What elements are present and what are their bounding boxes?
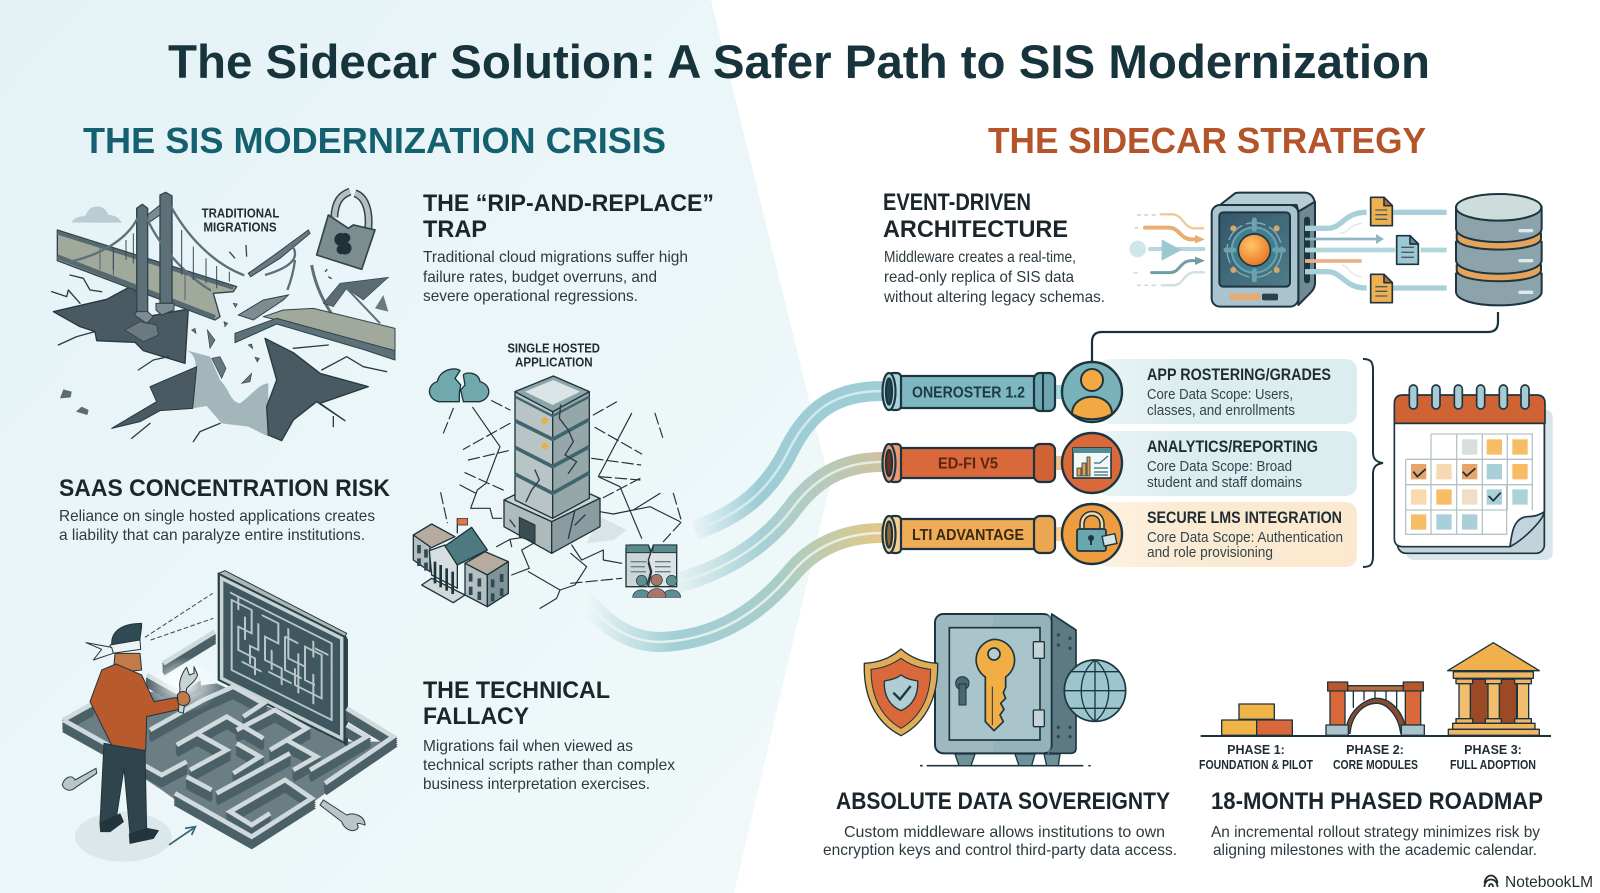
card text: Core Data Scope: Broad xyxy=(1147,459,1292,475)
card text xyxy=(1147,438,1318,491)
phase 3 label: FULL ADOPTION xyxy=(1450,758,1536,772)
illustration: blindfolded technician at maze xyxy=(62,571,397,862)
text block: event-driven architecture: Middleware creates a real-time, xyxy=(884,249,1076,266)
back maze wall xyxy=(218,571,347,745)
text block: rip-and-replace trap: severe operational regressions. xyxy=(423,288,638,305)
person xyxy=(86,623,198,843)
phase 1 label xyxy=(1199,743,1313,772)
loose wrench right xyxy=(320,800,365,831)
text block: the technical fallacy: THE TECHNICAL xyxy=(423,677,610,704)
background: left crisis panel xyxy=(0,0,830,893)
text block: absolute data sovereignty: Custom middleware allows institutions to own xyxy=(844,824,1165,841)
shield xyxy=(864,649,938,736)
tower xyxy=(504,477,600,522)
phase 1 label: PHASE 1: xyxy=(1227,743,1285,757)
text block: absolute data sovereignty xyxy=(823,788,1177,859)
icon: analytics xyxy=(1062,433,1122,493)
documents xyxy=(1371,197,1418,303)
standards row: oneroster xyxy=(882,359,1357,424)
text block: rip-and-replace trap xyxy=(423,190,714,305)
pipe label: LTI ADVANTAGE xyxy=(912,527,1024,544)
towers xyxy=(160,192,172,303)
pipe label: ONEROSTER 1.2 xyxy=(912,384,1025,402)
database xyxy=(1456,194,1542,305)
pipe label: ED-FI V5 xyxy=(938,456,998,472)
icon: academic calendar xyxy=(1394,385,1553,560)
text block: rip-and-replace trap: failure rates, budget overruns, and xyxy=(423,269,657,286)
document and people xyxy=(626,545,652,587)
outbound flows xyxy=(1305,212,1447,288)
card text: ANALYTICS/REPORTING xyxy=(1147,438,1318,456)
text block: event-driven architecture xyxy=(883,189,1105,306)
dashed failure lines xyxy=(441,400,682,608)
left cliff xyxy=(53,285,188,363)
text block: the technical fallacy: technical scripts rather than complex xyxy=(423,757,675,774)
label: single hosted application xyxy=(507,341,600,369)
padlock xyxy=(334,192,369,228)
text block: absolute data sovereignty: ABSOLUTE DATA SOVEREIGNTY xyxy=(836,788,1170,815)
card text xyxy=(1147,366,1331,419)
card text: Core Data Scope: Authentication xyxy=(1147,530,1343,546)
chasm mist xyxy=(185,350,268,437)
text block: event-driven architecture: EVENT-DRIVEN xyxy=(883,189,1031,216)
phase 1 label: FOUNDATION & PILOT xyxy=(1199,758,1313,772)
pipe xyxy=(882,444,1065,482)
label: traditional migrations: TRADITIONAL xyxy=(202,206,280,220)
right deck xyxy=(263,308,395,352)
heading: crisis: THE SIS MODERNIZATION CRISIS xyxy=(83,120,666,161)
text block: absolute data sovereignty: encryption keys and control third-party data access. xyxy=(823,842,1177,859)
text block: the technical fallacy: FALLACY xyxy=(423,703,529,730)
card text: and role provisioning xyxy=(1147,545,1273,561)
label: single hosted application: APPLICATION xyxy=(515,355,593,369)
phase labels xyxy=(1199,743,1536,772)
illustration: cracked single hosted application tower xyxy=(413,341,682,608)
card text: SECURE LMS INTEGRATION xyxy=(1147,509,1342,527)
card text: student and staff domains xyxy=(1147,475,1302,491)
card xyxy=(1098,431,1357,496)
label: traditional migrations: MIGRATIONS xyxy=(203,220,277,234)
card xyxy=(1098,359,1357,424)
broken pieces xyxy=(248,230,310,277)
text block: 18-month phased roadmap: 18-MONTH PHASED ROADMAP xyxy=(1211,788,1543,815)
text block: 18-month phased roadmap xyxy=(1211,788,1543,859)
connector: database to standards xyxy=(1092,312,1498,364)
pipe xyxy=(882,373,1065,411)
foundation bricks xyxy=(1222,704,1292,735)
server body xyxy=(1212,193,1315,307)
data streams connecting crisis to strategy xyxy=(585,391,882,642)
bridge xyxy=(1326,682,1424,735)
illustration: safe with key, shield and globe xyxy=(864,614,1126,766)
illustration: phased roadmap milestones xyxy=(1201,643,1551,736)
floor maze walls xyxy=(63,632,393,847)
label: traditional migrations xyxy=(202,206,280,234)
text block: event-driven architecture: read-only replica of SIS data xyxy=(884,269,1074,286)
text block: rip-and-replace trap: THE “RIP-AND-REPLACE” xyxy=(423,190,714,217)
logo: notebooklm: NotebookLM xyxy=(1505,874,1593,891)
icon: user xyxy=(1062,362,1122,422)
heading: strategy: THE SIDECAR STRATEGY xyxy=(988,120,1426,161)
card text: classes, and enrollments xyxy=(1147,403,1295,419)
illustration: collapsed bridge xyxy=(52,192,395,442)
standards row: ed-fi xyxy=(882,431,1357,496)
card text: Core Data Scope: Users, xyxy=(1147,387,1293,403)
pipe xyxy=(882,516,1065,553)
left deck xyxy=(57,230,237,320)
text block: the technical fallacy xyxy=(423,677,675,793)
temple xyxy=(1448,643,1539,735)
arrow xyxy=(169,827,195,845)
sight dashes xyxy=(145,593,213,640)
text block: rip-and-replace trap: Traditional cloud migrations suffer high xyxy=(423,249,688,266)
text block: event-driven architecture: ARCHITECTURE xyxy=(883,216,1068,243)
text block: saas concentration risk: SAAS CONCENTRATION RISK xyxy=(59,475,391,502)
card text: APP ROSTERING/GRADES xyxy=(1147,366,1331,384)
phase 2 label: CORE MODULES xyxy=(1333,758,1418,772)
phase 3 label: PHASE 3: xyxy=(1464,743,1522,757)
text block: event-driven architecture: without altering legacy schemas. xyxy=(883,289,1105,306)
text block: 18-month phased roadmap: An incremental rollout strategy minimizes risk by xyxy=(1211,824,1540,841)
cables xyxy=(70,202,243,290)
phase 2 label xyxy=(1333,743,1418,772)
card xyxy=(1098,502,1357,567)
inbound flows xyxy=(1134,214,1204,285)
wrench xyxy=(178,667,198,713)
card text xyxy=(1147,509,1343,561)
right cliff xyxy=(265,338,368,441)
cloud xyxy=(429,369,489,402)
bracket xyxy=(1363,359,1383,567)
text block: saas concentration risk: a liability that can paralyze entire institutions. xyxy=(59,527,365,544)
text block: rip-and-replace trap: TRAP xyxy=(423,216,487,243)
text block: the technical fallacy: business interpretation exercises. xyxy=(423,776,650,793)
phase 3 label xyxy=(1450,743,1536,772)
phase 2 label: PHASE 2: xyxy=(1346,743,1404,757)
text block: saas concentration risk xyxy=(59,475,391,544)
shadow xyxy=(75,812,172,862)
standards row: lti advantage xyxy=(882,502,1357,567)
icon: padlock xyxy=(1062,504,1122,564)
glow xyxy=(147,657,220,713)
text block: the technical fallacy: Migrations fail when viewed as xyxy=(423,738,633,755)
label: single hosted application: SINGLE HOSTED xyxy=(507,341,600,355)
loose wrench left xyxy=(62,768,97,790)
illustration: middleware server and database xyxy=(1129,193,1542,307)
title: The Sidecar Solution: A Safer Path to SIS Modernization xyxy=(168,35,1430,88)
text block: 18-month phased roadmap: aligning milestones with the academic calendar. xyxy=(1213,842,1537,859)
text block: saas concentration risk: Reliance on single hosted applications creates xyxy=(59,508,375,525)
globe xyxy=(1064,660,1126,721)
school building xyxy=(413,524,508,607)
